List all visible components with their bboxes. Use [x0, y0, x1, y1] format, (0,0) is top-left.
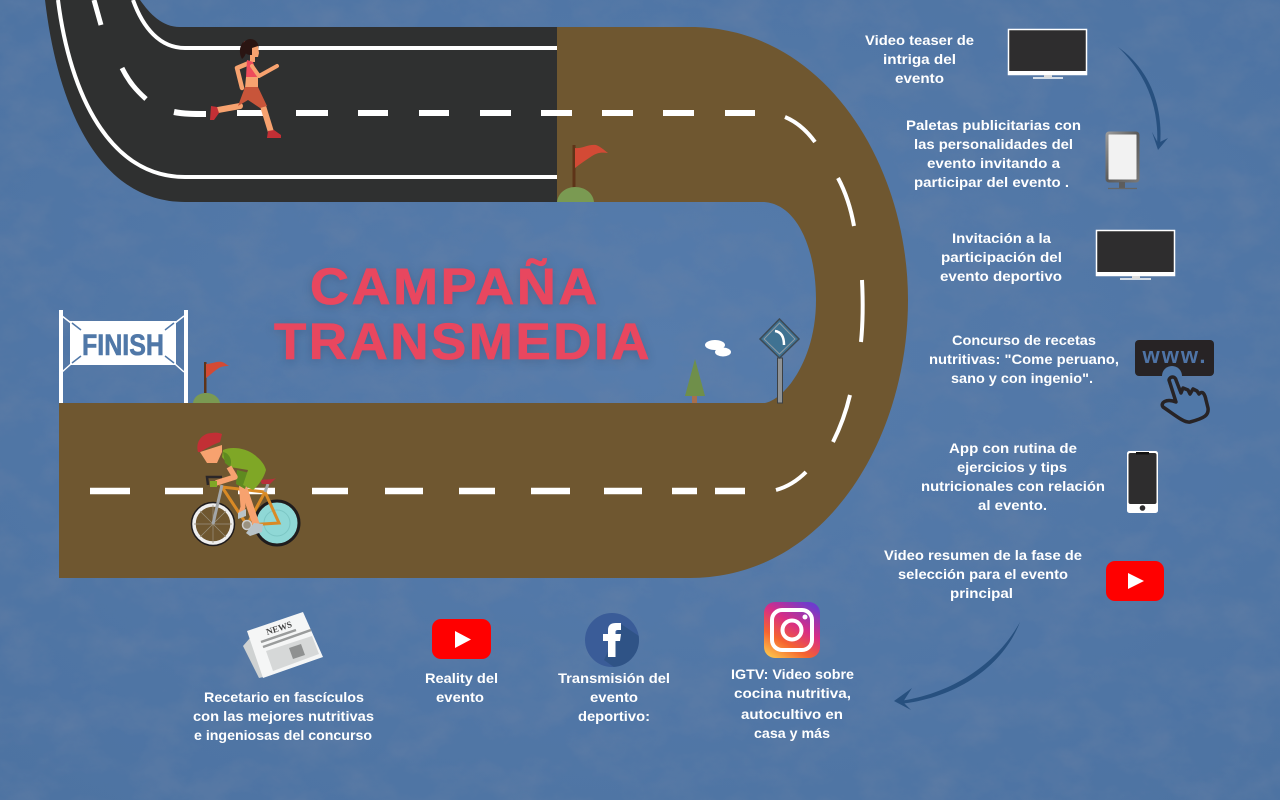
step: selection summary: Video resumen de la fase de	[884, 547, 1082, 563]
step: recipes contest: nutritivas: "Come peruano,	[929, 351, 1119, 367]
step: reality	[425, 670, 498, 705]
step: invitation	[940, 230, 1062, 284]
step: recipes contest: sano y con ingenio".	[951, 370, 1093, 386]
icon: youtube	[432, 619, 491, 659]
finish banner	[59, 310, 188, 403]
finish banner: FINISH	[82, 329, 164, 362]
step: reality: Reality del	[425, 670, 498, 686]
step: igtv	[731, 666, 854, 741]
step: igtv: autocultivo en	[741, 706, 843, 722]
step: invitation: participación del	[941, 249, 1062, 265]
step: video teaser: Video teaser de	[865, 32, 974, 48]
step: reality: evento	[436, 689, 484, 705]
icon: smartphone	[1127, 451, 1158, 513]
flag: finish	[193, 362, 229, 403]
step: billboards: Paletas publicitarias con	[906, 117, 1081, 133]
step: selection summary: principal	[950, 585, 1013, 601]
clouds	[705, 340, 731, 356]
road edge lines	[58, 0, 557, 177]
step: selection summary	[884, 547, 1082, 601]
centre dashes	[90, 0, 863, 491]
step: igtv: cocina nutritiva,	[734, 685, 851, 701]
title: CAMPAÑA	[310, 257, 600, 315]
step: recipes contest	[929, 332, 1119, 386]
step: selection summary: selección para el evento	[898, 566, 1068, 582]
step: broadcast: evento	[590, 689, 638, 705]
road: full track	[45, 0, 908, 578]
rider	[241, 478, 243, 513]
icon: tv	[1096, 230, 1174, 279]
step: broadcast	[558, 670, 670, 724]
step: recipe booklets: Recetario en fascículos	[204, 689, 364, 705]
step: igtv: casa y más	[754, 725, 830, 741]
title	[274, 257, 652, 372]
bike frame	[222, 487, 279, 525]
step: billboards	[906, 117, 1081, 190]
icon: billboard	[1107, 133, 1138, 188]
step: billboards: las personalidades del	[914, 136, 1073, 152]
step: app: nutricionales con relación	[921, 478, 1105, 494]
step: billboards: evento invitando a	[927, 155, 1060, 171]
cyclist	[192, 433, 299, 545]
road section: asphalt	[45, 0, 557, 202]
step: igtv: IGTV: Video sobre	[731, 666, 854, 682]
title: TRANSMEDIA	[274, 315, 652, 372]
title: TRANSMEDIA	[274, 313, 652, 370]
front wheel	[192, 503, 234, 545]
step: invitation: Invitación a la	[952, 230, 1051, 246]
step: video teaser: intriga del	[883, 51, 956, 67]
handlebar	[207, 477, 222, 485]
step: recipes contest: Concurso de recetas	[952, 332, 1096, 348]
step: video teaser	[865, 32, 974, 86]
step: recipe booklets: e ingeniosas del concurso	[194, 727, 372, 743]
road sign	[760, 319, 799, 403]
icon: newspaper: NEWS	[265, 619, 293, 637]
icon: www click	[1135, 340, 1214, 422]
icon: newspaper	[243, 612, 323, 678]
step: broadcast: Transmisión del	[558, 670, 670, 686]
step: app: App con rutina de	[949, 440, 1077, 456]
step: broadcast: deportivo:	[578, 708, 650, 724]
step: app: ejercicios y tips	[957, 459, 1067, 475]
flag: top	[557, 145, 608, 202]
tree	[685, 359, 705, 403]
step: app: al evento.	[978, 497, 1047, 513]
title: CAMPAÑA	[310, 259, 600, 317]
step: recipe booklets: con las mejores nutritivas	[193, 708, 374, 724]
arrow: down left	[894, 622, 1020, 710]
arrow: down right	[1118, 47, 1168, 150]
icon: tv	[1008, 30, 1086, 78]
step: invitation: evento deportivo	[940, 268, 1062, 284]
icon: youtube	[1106, 561, 1164, 601]
icon: www click: www.	[1141, 343, 1208, 368]
step: billboards: participar del evento .	[914, 174, 1069, 190]
step: app	[921, 440, 1105, 513]
runner	[210, 39, 281, 138]
step: video teaser: evento	[895, 70, 944, 86]
rear wheel	[255, 501, 299, 545]
road section: brown	[59, 27, 908, 578]
icon: instagram	[764, 602, 820, 658]
icon: facebook	[585, 613, 639, 667]
step: recipe booklets	[193, 689, 374, 743]
